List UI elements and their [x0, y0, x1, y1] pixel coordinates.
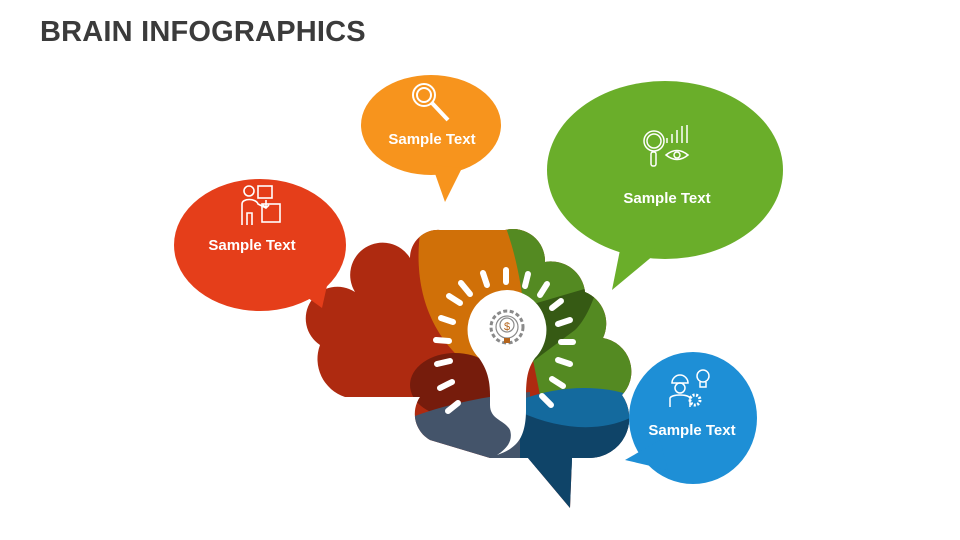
bubble: red	[174, 179, 346, 311]
icon: gear with dollar bulb	[491, 311, 523, 343]
icon: gear with dollar bulb: $	[504, 321, 510, 333]
icon: worker gear bulb	[670, 370, 709, 407]
brain	[306, 229, 632, 508]
title: BRAIN INFOGRAPHICS	[40, 16, 366, 48]
bubble: blue	[625, 352, 757, 484]
bubble: blue: Sample Text	[648, 422, 736, 439]
bubble: green: Sample Text	[623, 190, 711, 207]
bubble: red: Sample Text	[208, 237, 296, 254]
bubble: green	[547, 81, 783, 290]
bubble: orange: Sample Text	[388, 131, 476, 148]
icon: magnifier eye chart	[644, 125, 688, 166]
icon: puzzle person	[242, 186, 280, 225]
icon: magnifier	[413, 84, 448, 120]
bulb with rays	[436, 270, 573, 455]
bubble: orange	[361, 75, 501, 202]
